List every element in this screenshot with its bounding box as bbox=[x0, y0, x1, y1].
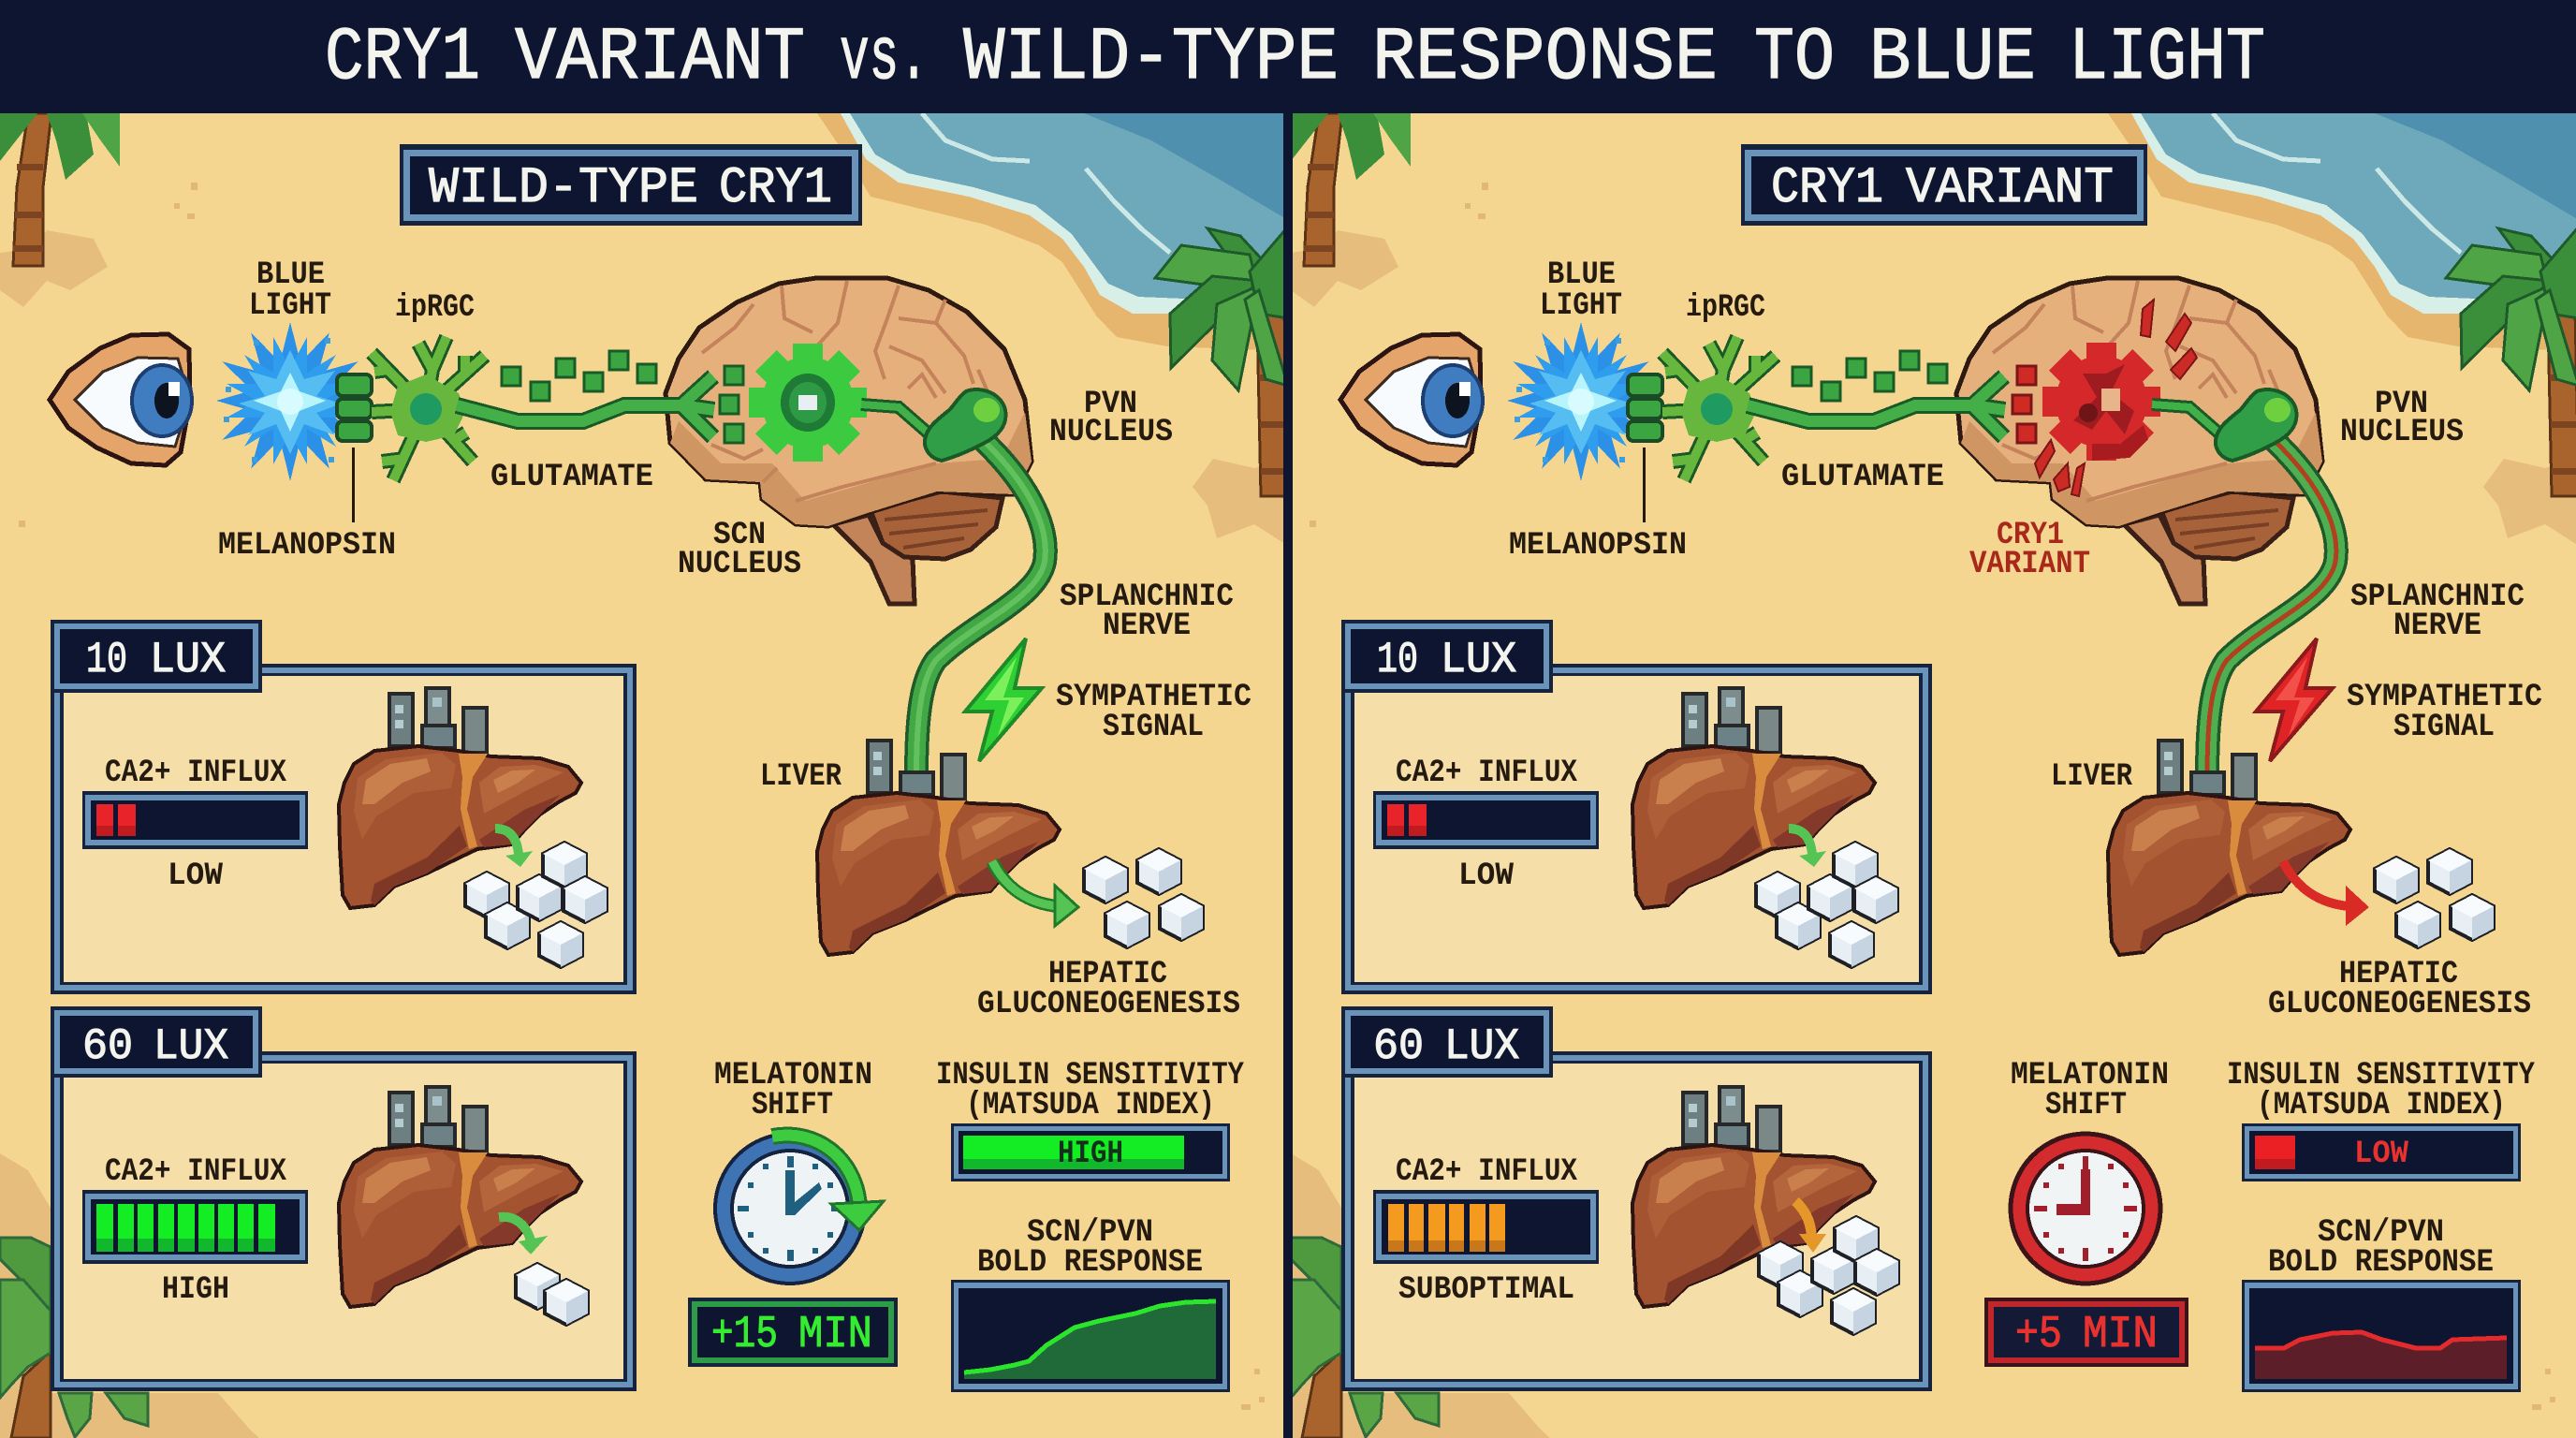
label: glutamate: GLUTAMATE bbox=[1781, 460, 1944, 495]
label: insulin sensitivity bbox=[936, 1058, 1244, 1123]
label: blue light bbox=[1540, 257, 1622, 324]
label: insulin sensitivity: (MATSUDA INDEX) bbox=[966, 1088, 1215, 1123]
label: sympathetic signal bbox=[2347, 680, 2542, 745]
label: PVN nucleus: PVN bbox=[1084, 387, 1137, 422]
label: blue light: LIGHT bbox=[1540, 288, 1622, 324]
label: sympathetic signal: SIGNAL bbox=[1103, 710, 1204, 745]
badge: +5 min bbox=[1984, 1298, 2188, 1367]
label: splanchnic nerve: SPLANCHNIC bbox=[1060, 580, 1234, 615]
label: BOLD response bbox=[977, 1215, 1203, 1281]
tab: 10 lux bbox=[51, 620, 262, 693]
label: sympathetic signal: SIGNAL bbox=[2393, 710, 2495, 745]
label: liver: LIVER bbox=[2051, 759, 2132, 795]
label: Ca2+ influx: CA2+ INFLUX bbox=[1396, 1154, 1578, 1190]
red shards bbox=[2035, 300, 2197, 496]
arrow: orange glucose bbox=[1795, 1201, 1826, 1253]
label: high: HIGH bbox=[162, 1272, 229, 1308]
label: BOLD response bbox=[2268, 1215, 2494, 1281]
panel: 10 lux bbox=[51, 620, 637, 994]
icon: blue light burst bbox=[216, 322, 364, 481]
label: PVN nucleus: NUCLEUS bbox=[2340, 415, 2464, 450]
label: melanopsin: MELANOPSIN bbox=[218, 528, 396, 564]
label: ipRGC: ipRGC bbox=[1686, 290, 1765, 326]
title bar: WILD-TYPE bbox=[963, 16, 1339, 101]
label: suboptimal: SUBOPTIMAL bbox=[1398, 1272, 1574, 1308]
panel: wild-type CRY1 bbox=[0, 113, 1289, 1438]
icon: eye bbox=[50, 334, 192, 465]
label: SCN nucleus: NUCLEUS bbox=[678, 547, 801, 582]
beach background bbox=[1291, 113, 2576, 1438]
tab: 10 lux: LUX bbox=[150, 636, 226, 684]
label: hepatic gluconeogenesis: GLUCONEOGENESIS bbox=[977, 987, 1240, 1022]
title bar: LIGHT bbox=[2069, 16, 2265, 101]
nerve to PVN bbox=[2152, 404, 2227, 440]
glutamate particles bbox=[502, 351, 743, 443]
badge: +15 min bbox=[688, 1298, 898, 1367]
label: low: LOW bbox=[168, 858, 224, 894]
arrow: glucose output bbox=[992, 861, 1078, 926]
glutamate particles bbox=[1793, 351, 2036, 443]
liver bbox=[1632, 1087, 1875, 1307]
ipRGC neuron bbox=[337, 337, 485, 480]
bar: insulin sensitivity high: HIGH bbox=[1058, 1137, 1123, 1172]
label: ipRGC: ipRGC bbox=[395, 290, 475, 326]
label: PVN nucleus bbox=[1049, 387, 1173, 450]
bar: insulin sensitivity low: LOW bbox=[2354, 1137, 2409, 1172]
label: insulin sensitivity: INSULIN SENSITIVITY bbox=[936, 1058, 1244, 1093]
tab: 60 lux: 60 bbox=[82, 1022, 133, 1071]
title bar: BLUE bbox=[1869, 16, 2036, 101]
label: sympathetic signal: SYMPATHETIC bbox=[1056, 680, 1251, 715]
label: hepatic gluconeogenesis: HEPATIC bbox=[1048, 957, 1167, 992]
bar: low influx bbox=[82, 791, 308, 849]
panel: 60 lux bbox=[51, 1006, 637, 1391]
label: insulin sensitivity: (MATSUDA INDEX) bbox=[2257, 1088, 2506, 1123]
nerve to PVN fill bbox=[861, 404, 936, 440]
arrow: glucose bbox=[1789, 829, 1826, 867]
label: liver: LIVER bbox=[760, 759, 842, 795]
panel heading: CRY1 variant: CRY1 bbox=[1771, 160, 1883, 217]
title bar: CRY1 bbox=[325, 16, 480, 101]
glucose cubes bbox=[1756, 843, 1897, 967]
label: BOLD response: BOLD RESPONSE bbox=[2268, 1245, 2494, 1281]
bar: insulin sensitivity high bbox=[951, 1123, 1230, 1181]
PVN nucleus bbox=[2216, 389, 2296, 461]
chart: BOLD response flat bbox=[2242, 1280, 2521, 1392]
label: BOLD response: SCN/PVN bbox=[1027, 1215, 1153, 1251]
tab: 60 lux: 60 bbox=[1373, 1022, 1424, 1071]
icon: blue light burst bbox=[1507, 322, 1655, 481]
label: blue light: BLUE bbox=[1547, 257, 1616, 293]
tab: 60 lux bbox=[51, 1006, 262, 1078]
splanchnic nerve bbox=[916, 440, 1046, 776]
label: splanchnic nerve bbox=[2350, 580, 2525, 644]
tab: 60 lux: LUX bbox=[1444, 1022, 1519, 1071]
label: blue light: LIGHT bbox=[249, 288, 331, 324]
bar: insulin sensitivity low bbox=[2242, 1123, 2521, 1181]
badge: +15 min: MIN bbox=[798, 1310, 872, 1360]
label: CRY1 variant bbox=[1969, 518, 2090, 582]
divider bbox=[1283, 113, 1293, 1438]
PVN nucleus bbox=[925, 389, 1005, 461]
label: hepatic gluconeogenesis bbox=[977, 957, 1240, 1022]
label: melanopsin: MELANOPSIN bbox=[1509, 528, 1687, 564]
glucose cubes bbox=[465, 843, 607, 967]
splanchnic nerve with red core bbox=[2207, 440, 2336, 776]
label: melatonin shift: MELATONIN bbox=[2011, 1058, 2169, 1093]
liver bbox=[2108, 741, 2350, 955]
label: blue light bbox=[249, 257, 331, 324]
ipRGC neuron bbox=[1628, 337, 1776, 480]
label: CRY1 variant: CRY1 bbox=[1997, 518, 2064, 553]
label: melatonin shift: SHIFT bbox=[2045, 1088, 2127, 1123]
title bar: TO bbox=[1754, 16, 1835, 101]
icon: broken SCN gear bbox=[2042, 343, 2160, 461]
glucose cubes bbox=[1084, 849, 1203, 947]
label: PVN nucleus: PVN bbox=[2375, 387, 2428, 422]
label: sympathetic signal: SYMPATHETIC bbox=[2347, 680, 2542, 715]
label: BOLD response: SCN/PVN bbox=[2318, 1215, 2444, 1251]
label: insulin sensitivity bbox=[2227, 1058, 2535, 1123]
arrow: reduced glucose output bbox=[2283, 861, 2369, 926]
label: splanchnic nerve bbox=[1060, 580, 1234, 644]
label: SCN nucleus: SCN bbox=[713, 518, 766, 553]
label: low: LOW bbox=[1458, 858, 1515, 894]
melanopsin leader line bbox=[1643, 448, 1646, 522]
glucose cubes bbox=[1759, 1217, 1898, 1334]
label: melatonin shift bbox=[714, 1058, 872, 1123]
title bar bbox=[0, 0, 2576, 113]
melanopsin leader line bbox=[352, 448, 355, 522]
tab: 10 lux bbox=[1341, 620, 1553, 693]
liver bbox=[817, 741, 1060, 955]
bar: low influx bbox=[1373, 791, 1599, 849]
label: hepatic gluconeogenesis: HEPATIC bbox=[2339, 957, 2458, 992]
icon: eye bbox=[1340, 334, 1483, 465]
icon: red clock bbox=[2011, 1134, 2160, 1284]
label: splanchnic nerve: NERVE bbox=[2393, 609, 2481, 644]
badge: +15 min: +15 bbox=[711, 1310, 778, 1360]
brain bbox=[1956, 278, 2322, 604]
panel heading: wild-type CRY1: WILD-TYPE bbox=[429, 160, 698, 217]
label: melatonin shift bbox=[2011, 1058, 2169, 1123]
label: melatonin shift: SHIFT bbox=[752, 1088, 833, 1123]
bar: suboptimal influx bbox=[1373, 1190, 1599, 1264]
panel: 60 lux bbox=[1341, 1006, 1932, 1391]
label: hepatic gluconeogenesis: GLUCONEOGENESIS bbox=[2268, 987, 2531, 1022]
badge: +5 min: +5 bbox=[2015, 1310, 2062, 1360]
tab: 60 lux bbox=[1341, 1006, 1553, 1078]
label: splanchnic nerve: NERVE bbox=[1103, 609, 1191, 644]
panel: CRY1 variant bbox=[1291, 113, 2576, 1438]
label: hepatic gluconeogenesis bbox=[2268, 957, 2531, 1022]
axon bbox=[1748, 376, 2005, 437]
tab: 60 lux: LUX bbox=[154, 1022, 228, 1071]
arrow: glucose bbox=[499, 1217, 548, 1255]
panel heading: CRY1 variant bbox=[1741, 144, 2147, 226]
bar: high influx bbox=[82, 1190, 308, 1264]
label: Ca2+ influx: CA2+ INFLUX bbox=[1396, 756, 1578, 791]
icon: red lightning bbox=[2256, 638, 2333, 761]
label: melatonin shift: MELATONIN bbox=[714, 1058, 872, 1093]
panel heading: CRY1 variant: VARIANT bbox=[1906, 160, 2114, 217]
tab: 10 lux: 10 bbox=[86, 636, 127, 684]
title bar: RESPONSE bbox=[1372, 16, 1718, 101]
nerve to PVN bbox=[861, 404, 936, 440]
chart: BOLD response rising bbox=[951, 1280, 1230, 1392]
brain bbox=[666, 278, 1032, 604]
axon bbox=[457, 376, 714, 437]
label: PVN nucleus: NUCLEUS bbox=[1049, 415, 1173, 450]
label: Ca2+ influx: CA2+ INFLUX bbox=[105, 1154, 287, 1190]
label: SCN nucleus bbox=[678, 518, 801, 582]
panel heading: wild-type CRY1: CRY1 bbox=[719, 160, 832, 217]
arrow: glucose bbox=[495, 829, 533, 867]
glucose cubes bbox=[2375, 849, 2494, 947]
beach background bbox=[0, 113, 1289, 1438]
liver bbox=[339, 688, 581, 908]
title bar: VARIANT bbox=[515, 16, 805, 101]
label: Ca2+ influx: CA2+ INFLUX bbox=[105, 756, 287, 791]
label: PVN nucleus bbox=[2340, 387, 2464, 450]
icon: SCN gear bbox=[749, 344, 867, 462]
nerve to PVN fill bbox=[2152, 404, 2227, 440]
glucose cubes bbox=[516, 1264, 588, 1325]
icon: lightning bbox=[965, 638, 1042, 761]
panel heading: wild-type CRY1 bbox=[400, 144, 862, 226]
label: blue light: BLUE bbox=[256, 257, 325, 293]
liver bbox=[1632, 688, 1875, 908]
title bar: vs. bbox=[840, 16, 929, 101]
label: BOLD response: BOLD RESPONSE bbox=[977, 1245, 1203, 1281]
liver bbox=[339, 1087, 581, 1307]
tab: 10 lux: 10 bbox=[1377, 636, 1418, 684]
tab: 10 lux: LUX bbox=[1441, 636, 1516, 684]
icon: clock with green arrow bbox=[715, 1134, 884, 1284]
label: sympathetic signal bbox=[1056, 680, 1251, 745]
label: splanchnic nerve: SPLANCHNIC bbox=[2350, 580, 2525, 615]
label: glutamate: GLUTAMATE bbox=[490, 460, 653, 495]
badge: +5 min: MIN bbox=[2083, 1310, 2158, 1360]
panel: 10 lux bbox=[1341, 620, 1932, 994]
label: CRY1 variant: VARIANT bbox=[1969, 547, 2090, 582]
